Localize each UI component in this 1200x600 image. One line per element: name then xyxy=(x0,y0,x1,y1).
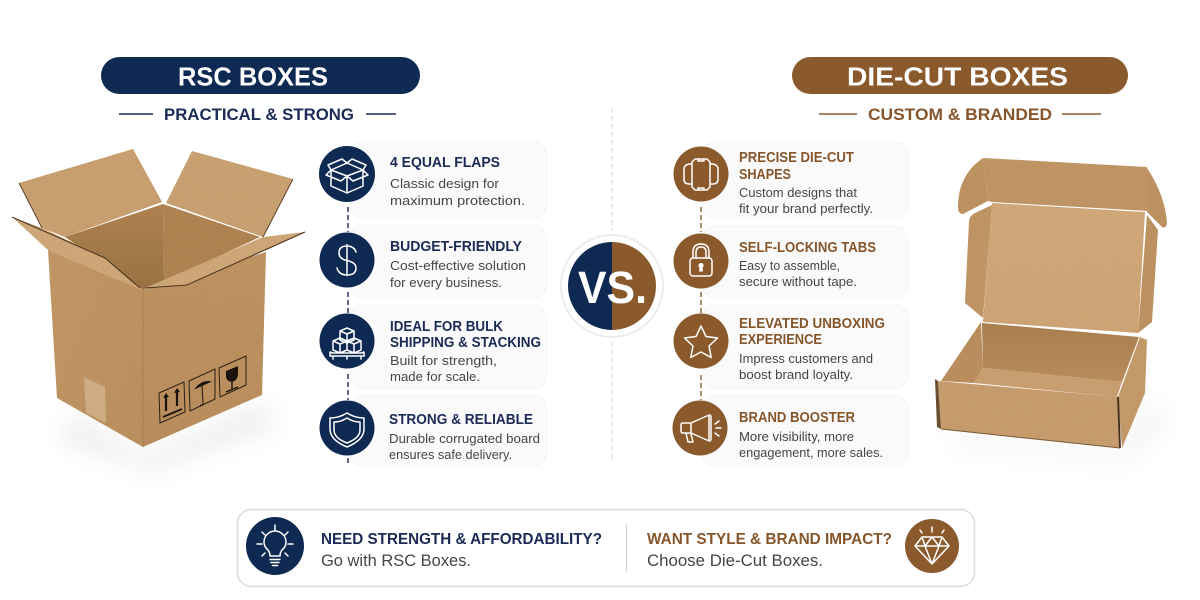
icon: star xyxy=(674,314,728,368)
panel: brand booster: BRAND BOOSTER xyxy=(739,410,855,426)
heading: RSC Boxes: RSC BOXES xyxy=(178,62,328,92)
icon: fragile glass xyxy=(219,356,246,397)
panel: bulk shipping and stacking: Built for strength, xyxy=(390,353,497,368)
divider: center dashed line xyxy=(611,108,613,460)
panel: budget-friendly xyxy=(320,225,547,298)
icon: dollar sign xyxy=(320,232,374,288)
panel: budget-friendly: for every business. xyxy=(390,275,502,290)
panel: self-locking tabs: SELF-LOCKING TABS xyxy=(739,240,876,256)
panel: bottom summary: WANT STYLE & BRAND IMPACT? xyxy=(647,531,892,548)
panel: bottom summary: NEED STRENGTH & AFFORDABILITY? xyxy=(321,531,602,548)
panel: elevated unboxing experience xyxy=(674,305,908,388)
panel: bottom summary: Choose Die-Cut Boxes. xyxy=(647,552,823,570)
panel: bulk shipping and stacking: made for scale. xyxy=(390,369,480,384)
icon: shield xyxy=(320,400,374,456)
panel: 4 equal flaps xyxy=(319,142,547,218)
heading: RSC Boxes xyxy=(101,57,420,94)
icon: diamond xyxy=(905,519,959,573)
icon: keep dry umbrella xyxy=(189,369,215,411)
icon: die-cut template xyxy=(674,146,728,202)
panel: brand booster xyxy=(672,396,908,466)
panel: self-locking tabs xyxy=(674,226,908,298)
panel: strong and reliable: Durable corrugated board xyxy=(389,431,540,446)
panel: elevated unboxing experience: ELEVATED UNBOXING xyxy=(739,316,885,332)
panel: bulk shipping and stacking: IDEAL FOR BULK xyxy=(390,319,503,335)
panel: elevated unboxing experience: Impress customers and xyxy=(739,351,873,366)
icon: megaphone xyxy=(672,400,728,456)
panel: 4 equal flaps: maximum protection. xyxy=(390,193,525,208)
panel: precise die-cut shapes: SHAPES xyxy=(739,167,791,183)
panel: bottom summary: Go with RSC Boxes. xyxy=(321,552,471,570)
panel: 4 equal flaps: 4 EQUAL FLAPS xyxy=(390,155,500,171)
subheading: practical and strong: PRACTICAL & STRONG xyxy=(164,105,354,124)
panel: budget-friendly: BUDGET-FRIENDLY xyxy=(390,239,522,255)
panel: self-locking tabs: secure without tape. xyxy=(739,274,857,289)
heading: Die-Cut Boxes xyxy=(792,57,1128,94)
panel: bulk shipping and stacking xyxy=(320,305,547,388)
panel: elevated unboxing experience: EXPERIENCE xyxy=(739,332,822,348)
icon: this way up xyxy=(159,382,185,423)
badge: VS: VS. xyxy=(578,262,647,313)
panel: self-locking tabs: Easy to assemble, xyxy=(739,258,840,273)
icon: padlock xyxy=(674,234,728,288)
icon: stacked cubes on pallet xyxy=(320,314,374,368)
icon: light bulb xyxy=(246,517,304,575)
panel: strong and reliable xyxy=(320,396,547,466)
panel: strong and reliable: STRONG & RELIABLE xyxy=(389,412,533,428)
panel: 4 equal flaps: Classic design for xyxy=(390,176,500,191)
connector: die-cut timeline xyxy=(700,207,702,400)
subheading: custom and branded: CUSTOM & BRANDED xyxy=(868,105,1052,124)
panel: bulk shipping and stacking: SHIPPING & STACKING xyxy=(390,335,541,351)
panel: precise die-cut shapes: Custom designs that xyxy=(739,185,857,200)
panel: precise die-cut shapes: fit your brand perfectly. xyxy=(739,201,873,216)
panel: precise die-cut shapes: PRECISE DIE-CUT xyxy=(739,150,854,166)
panel: bottom summary xyxy=(238,510,974,586)
illustration: open die-cut mailer box xyxy=(935,158,1167,462)
heading: Die-Cut Boxes: DIE-CUT BOXES xyxy=(847,62,1068,92)
panel: elevated unboxing experience: boost brand loyalty. xyxy=(739,367,853,382)
panel: strong and reliable: ensures safe delivery. xyxy=(389,447,512,462)
panel: brand booster: engagement, more sales. xyxy=(739,445,883,460)
connector: RSC timeline xyxy=(347,207,349,466)
panel: precise die-cut shapes xyxy=(674,142,908,218)
icon: open box xyxy=(319,146,375,202)
panel: budget-friendly: Cost-effective solution xyxy=(390,258,526,273)
badge: VS xyxy=(561,235,663,337)
panel: brand booster: More visibility, more xyxy=(739,429,854,444)
illustration: open RSC box xyxy=(12,149,305,470)
